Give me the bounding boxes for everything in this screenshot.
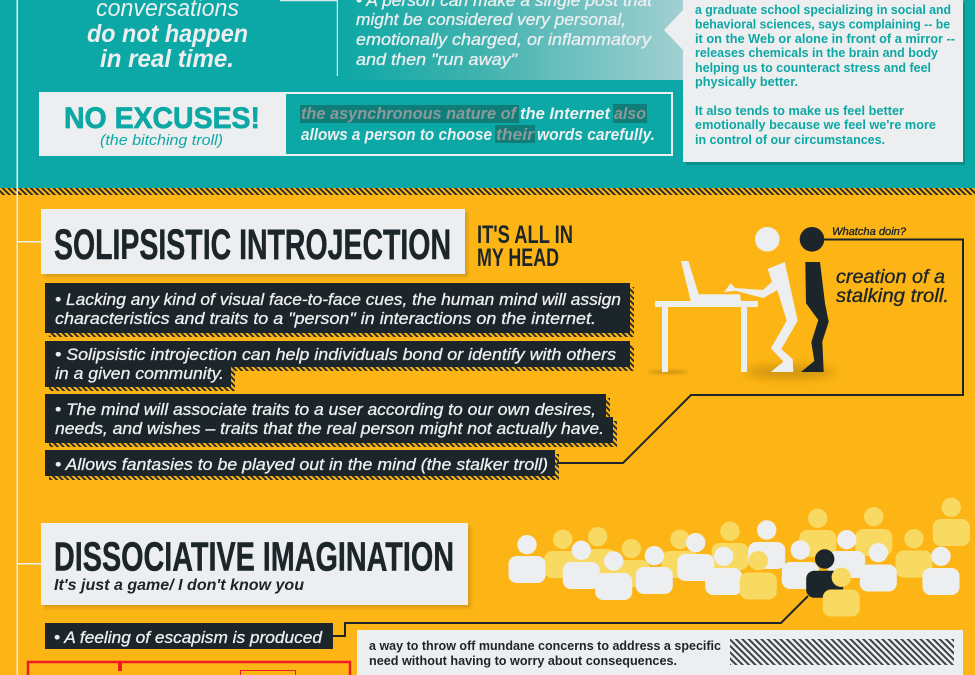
callout text: releases chemicals in the brain and body [695,45,939,60]
explanation text [369,638,721,668]
panel: asynchronous nature statement [285,93,672,155]
panel: asynchronous nature statement: allows a person to choose [301,126,492,144]
heading: no excuses: NO EXCUSES! [64,102,260,135]
yellow person overlapping dark person [823,568,860,616]
floor shadows [745,366,835,378]
panel: asynchronous nature statement: the Internet [520,105,612,123]
explanation text: a way to throw off mundane concerns to address a specific [369,638,721,653]
speech: whatcha doin: Whatcha doin? [832,226,907,238]
bullet one [45,283,634,337]
callout text [695,2,955,147]
callout text: helping us to counteract stress and feel [695,60,931,75]
yellow background section [0,195,975,675]
white figure [724,227,798,372]
bullet four: • Allows fantasies to be played out in the mind (the stalker troll) [55,455,548,474]
panel: solipsistic introjection heading [41,209,468,277]
panel: red outlined box [28,662,350,675]
label: creation of a stalking troll: creation of a [836,266,945,288]
bullet three [45,394,617,447]
heading: conversations do not happen in real time: in real time. [100,45,234,73]
callout text: it on the Web or alone in front of a mirror -- [695,31,955,46]
text block: run away: might be considered very personal, [356,10,626,29]
hatched section divider [0,188,975,195]
callout line: stalking troll [557,240,963,463]
subheading: the bitching troll: (the bitching troll) [100,132,223,149]
bullet list: solipsistic introjection [45,283,634,480]
dark figure [800,227,829,372]
panel: dissociative imagination heading [41,523,471,608]
connector: dissociative heading [17,563,41,564]
bullet: feeling of escapism [45,623,333,649]
heading: conversations do not happen in real time [87,0,248,73]
callout text: emotionally because we feel we're more [695,117,936,132]
explanation text: need without having to worry about consequences. [369,653,677,668]
bullet three: • The mind will associate traits to a user according to our own desires, [55,400,596,419]
bullet three: needs, and wishes – traits that the real person might not actually have. [55,419,604,438]
panel: real time statement [87,0,248,73]
yellow person in front [740,551,777,600]
dark highlighted person [806,549,843,598]
timeline vertical line [16,0,18,675]
panel: no excuses [39,92,285,156]
bullet one: characteristics and traits to a "person" in interactions on the internet. [55,309,596,328]
hatched decoration [730,639,954,665]
heading: conversations do not happen in real time: do not happen [87,20,248,48]
bullet two: in a given community. [55,364,224,383]
gradient background behind run-away text [338,0,684,80]
subheading: it's all in my head: MY HEAD [477,244,559,272]
title: SOLIPSISTIC INTROJECTION [54,221,451,269]
label: creation of a stalking troll [836,266,949,307]
panel: asynchronous nature statement: also [614,105,646,123]
laptop [681,261,741,301]
bullet two [45,341,634,391]
panel: asynchronous nature statement: their [496,126,536,144]
text block: run away: and then "run away" [356,50,518,69]
icon: stalker and desk illustration [648,227,835,378]
label: creation of a stalking troll: stalking troll. [836,285,949,307]
text block: run away [356,0,653,69]
callout text: physically better. [695,74,798,89]
callout text: a graduate school specializing in social and [695,2,951,17]
text block: run away: emotionally charged, or inflammatory [356,30,653,49]
panel: asynchronous nature statement: the asynchronous nature of [301,105,517,123]
panel: asynchronous nature statement: words carefully. [537,126,655,144]
subtitle: It's just a game/ I don't know you [54,577,304,594]
bullet one: • Lacking any kind of visual face-to-face cues, the human mind will assign [55,290,621,309]
panel: escapism explanation [357,630,963,675]
connector lines around run-away text [280,0,338,76]
title: DISSOCIATIVE IMAGINATION [54,534,454,580]
connector: solipsistic heading [17,241,41,242]
callout line: escapism [333,596,808,636]
subheading: it's all in my head [477,221,573,272]
icon: crowd of people [508,498,970,616]
callout text: in control of our circumstances. [695,132,885,147]
bullet two: • Solipsistic introjection can help individuals bond or identify with others [55,345,617,364]
callout text: It also tends to make us feel better [695,103,904,118]
callout text: behavioral sciences, says complaining -- be [695,16,950,32]
teal background section [0,0,975,188]
panel: complaining callout [664,0,965,165]
bullet four [45,450,559,480]
desk [655,301,758,372]
front row [508,520,960,600]
back row [544,498,970,587]
subheading: it's all in my head: IT'S ALL IN [477,221,573,249]
bullet: feeling of escapism: • A feeling of escapism is produced [54,628,323,647]
